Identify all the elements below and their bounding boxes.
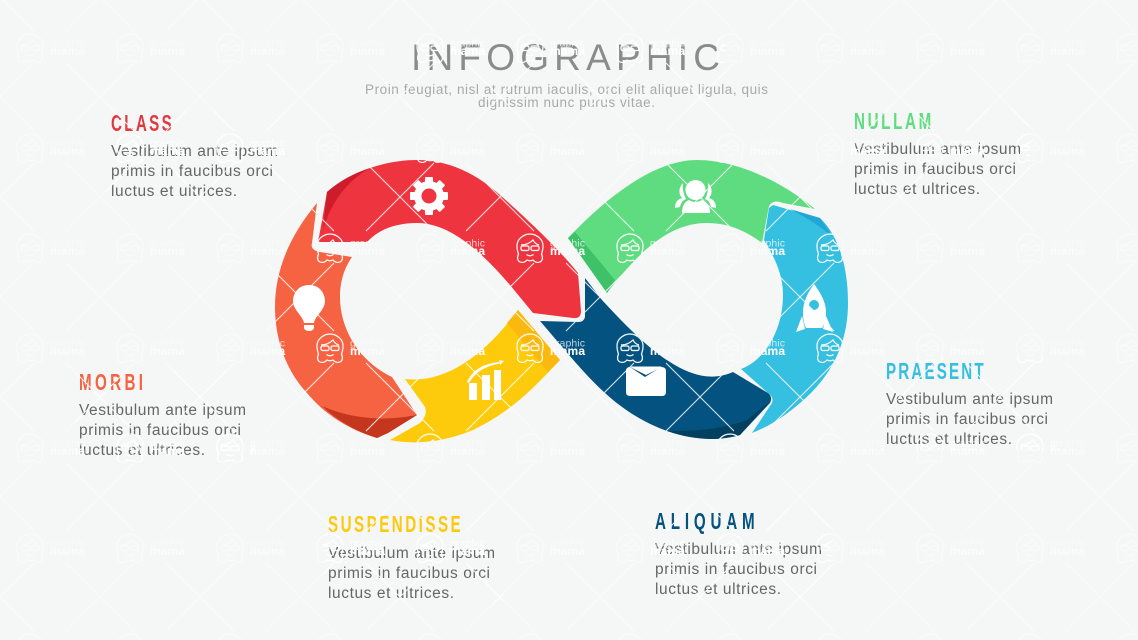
panel: class: luctus et ultrices. [111,183,237,200]
icon: envelope [626,366,666,396]
subtitle: Proin feugiat, nisl at rutrum iaculis, orci elit aliquet ligula, quis [365,82,768,97]
icon: growth chart [467,360,504,400]
panel: morbi [79,370,246,459]
icon: rocket [796,284,833,332]
panel: praesent: PRAESENT [886,359,984,385]
panel: praesent: luctus et ultrices. [886,431,1012,448]
panel: morbi: luctus et ultrices. [79,442,205,459]
panel: aliquam: luctus et ultrices. [655,581,781,598]
panel: class: primis in faucibus orci [111,163,273,180]
watermark overlay: strong over artwork and text [80,44,1028,598]
panel: aliquam: Vestibulum ante ipsum [655,541,822,558]
panel: praesent [886,359,1053,448]
infinity diagram [275,160,848,442]
icon: gear [410,177,448,215]
panel: aliquam [655,509,822,598]
segment: orange [275,203,417,438]
panel: aliquam: primis in faucibus orci [655,561,817,578]
panel: morbi: Vestibulum ante ipsum [79,402,246,419]
panel: praesent: primis in faucibus orci [886,411,1048,428]
segment: cyan [741,205,848,433]
panel: morbi: primis in faucibus orci [79,422,241,439]
panel: suspendisse: Vestibulum ante ipsum [328,545,495,562]
panel: suspendisse: luctus et ultrices. [328,585,454,602]
panel: praesent: Vestibulum ante ipsum [886,391,1053,408]
icon: light bulb [293,285,325,331]
panel: suspendisse: primis in faucibus orci [328,565,490,582]
panel: suspendisse: SUSPENDISSE [328,512,461,538]
panel: nullam: Vestibulum ante ipsum [854,141,1021,158]
panel: class [111,111,278,200]
title: INFOGRAPHIC [411,37,720,78]
panel: aliquam: ALIQUAM [655,509,755,535]
panel: class: Vestibulum ante ipsum [111,143,278,160]
panel: morbi: MORBI [79,370,143,396]
segment: red [318,160,581,318]
panel: nullam: luctus et ultrices. [854,181,980,198]
segment: green [568,160,815,293]
subtitle [365,82,768,110]
panel: nullam [854,109,1021,198]
panel: class: CLASS [111,111,172,137]
segment: navy [540,278,771,439]
segment: yellow [390,310,560,442]
panel: nullam: primis in faucibus orci [854,161,1016,178]
icon: people [675,180,716,213]
panel: nullam: NULLAM [854,109,931,135]
subtitle: dignissim nunc purus vitae. [478,95,655,110]
panel: suspendisse [328,512,495,602]
